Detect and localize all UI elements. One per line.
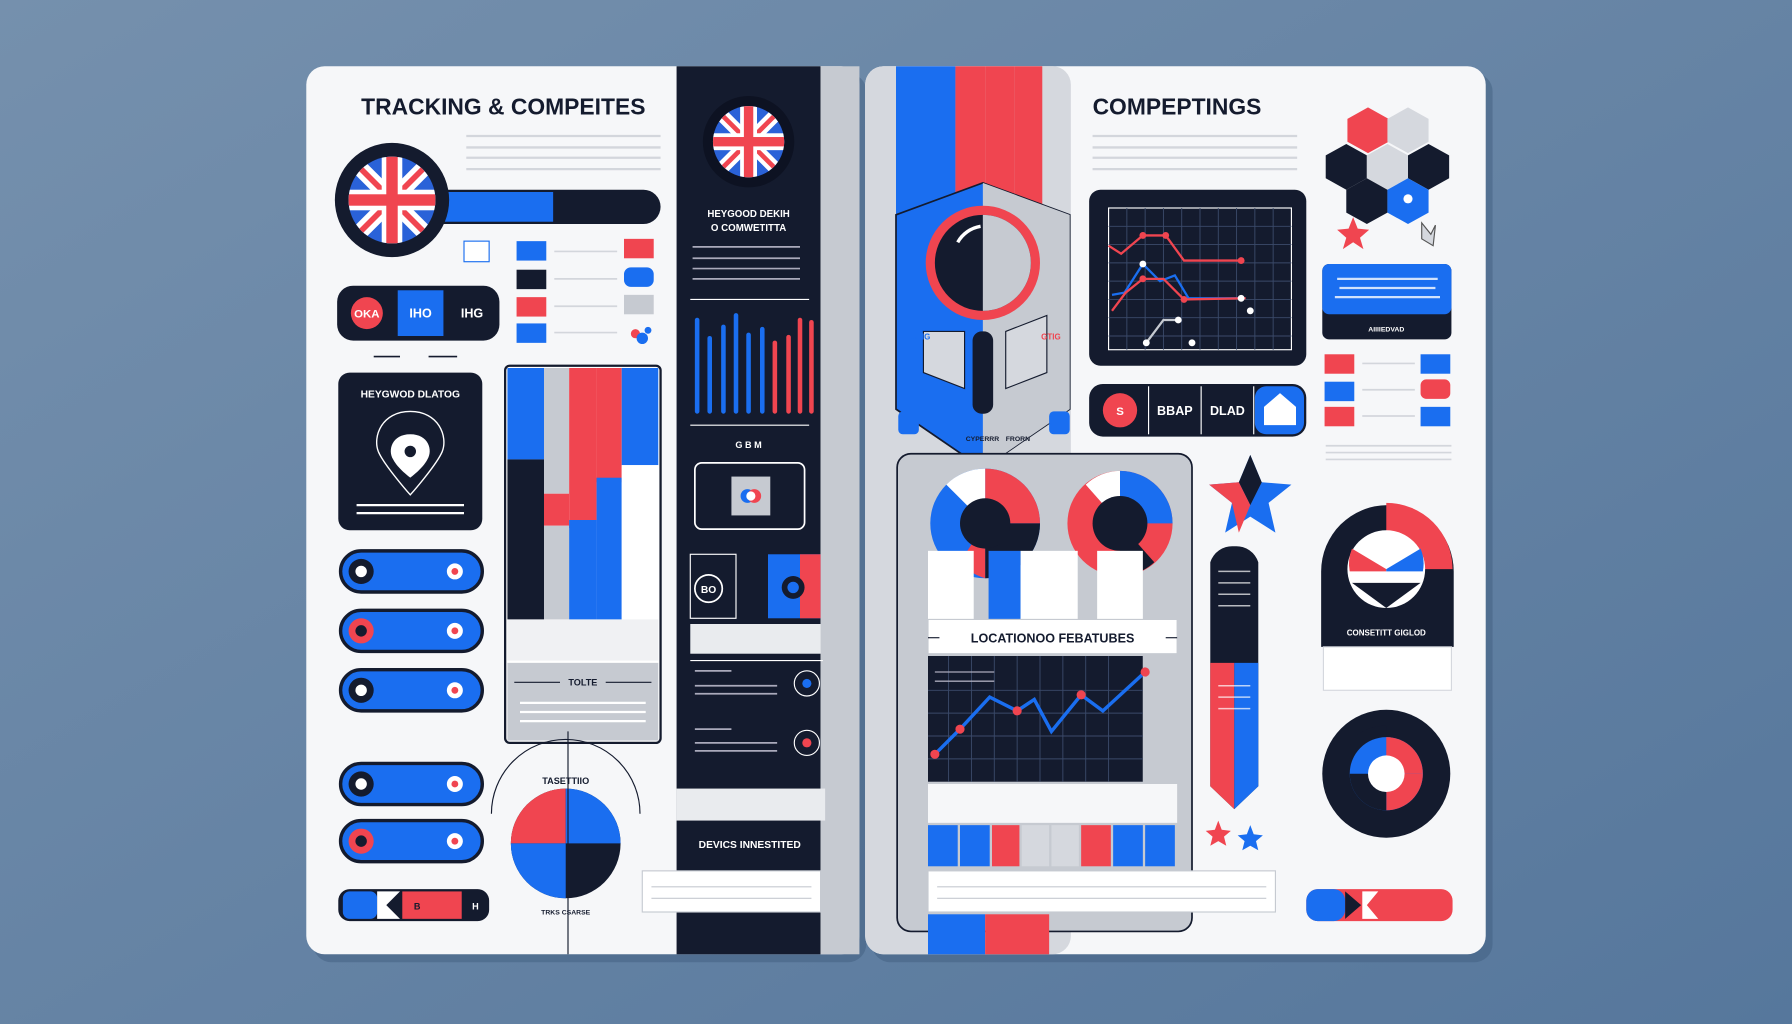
segmented button: OKA [354,309,380,321]
line chart [928,656,1177,782]
legend items [464,239,654,344]
bar chart: stacked columns: TOLTE [568,678,597,688]
sidebar content: DEVICS INNESTITED [699,840,801,851]
sidebar content: HEYGOOD DEKIH [707,209,790,220]
segmented control: DLAD [1210,404,1245,418]
nav pill: H [472,902,479,912]
icon: star [1209,455,1291,533]
shield with magnifier: CYPERRR [966,436,999,443]
segmented button: IHO [409,307,432,321]
line chart: dark tablet [1089,190,1306,366]
bar chart: stacked columns [505,366,661,743]
callout: blue info card: AIIIIEDVAD [1368,326,1404,333]
shield with magnifier: FRORN [1006,436,1030,443]
sidebar content [642,96,825,912]
nav pill [338,889,489,921]
title: TRACKING & COMPEITES [361,93,645,119]
pie chart: TRKS CSARSE [541,909,591,916]
segmented control: S [1116,406,1124,418]
nav pill right [1306,889,1453,921]
donut chart small [1322,710,1450,838]
legend swatches [928,825,1175,866]
legend grid [1325,354,1451,459]
toggle list [341,551,482,862]
segmented button: IHG [461,307,483,321]
segmented control: BBAP [1157,404,1193,418]
callout: blue info card [1322,264,1451,339]
segmented control [1089,384,1306,437]
panel: location features: LOCATIONOO FEBATUBES [971,631,1134,645]
shield with magnifier: GTIG [911,332,930,341]
panel: location features [897,454,1275,954]
dark strip [677,66,821,954]
pie chart: TASETTIIO [542,776,589,786]
pie chart [491,731,640,954]
sidebar content: O COMWETITTA [711,223,786,234]
icon: magnifier flag [335,143,661,257]
panel: right page [865,66,1493,962]
icon: small stars [1206,821,1263,850]
segmented button [337,286,499,341]
donut charts [930,469,1173,578]
panel: location card [338,373,482,530]
donut with label card: CONSETITT GIGLOD [1347,628,1426,637]
sidebar content: BO [701,585,716,596]
panel: location card: HEYGWOD DLATOG [361,390,460,401]
donut with label card [1321,503,1454,690]
sidebar content: G B M [735,440,762,450]
bar chart: thin bars [697,315,811,411]
shield with magnifier [896,66,1070,469]
ribbon banner [1210,546,1258,809]
title: COMPEPTINGS [1093,93,1261,119]
icon: hexagon cluster [1326,107,1449,249]
panel: left page [306,66,866,962]
nav pill: B [414,902,421,912]
shield with magnifier: GTIG [1041,332,1061,341]
